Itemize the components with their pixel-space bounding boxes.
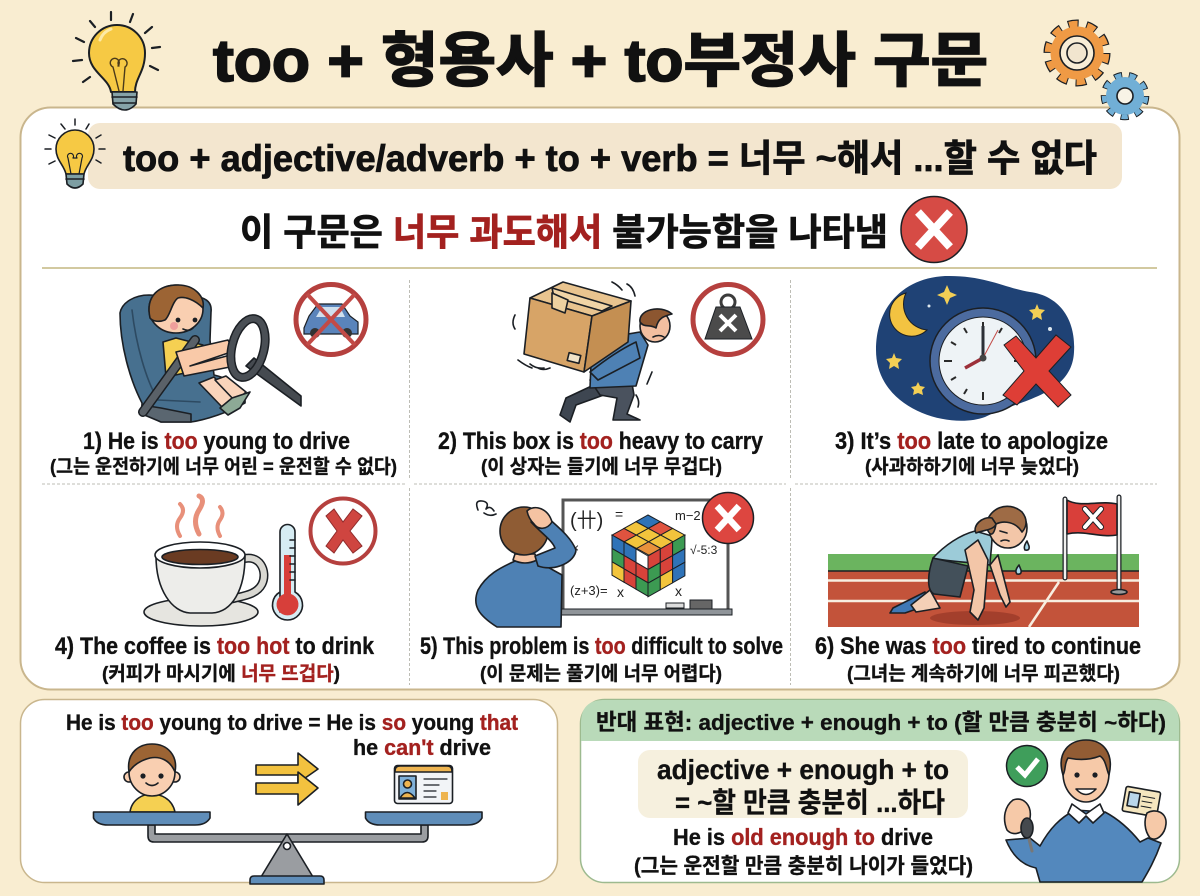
illustration: whiteboard with cube: [476, 500, 732, 627]
translation 5: (이 문제는 풀기에 너무 어렵다): [480, 663, 722, 685]
icon: red X badge: [702, 492, 754, 544]
panel 3: too late to apologize: [835, 276, 1108, 478]
equivalence sentence: he can't drive: [353, 735, 491, 760]
illustration: night clock: [876, 276, 1074, 421]
icon: red X in ring: [310, 498, 376, 564]
caption 2: 2) This box is too heavy to carry: [438, 428, 764, 455]
caption 1: 1) He is too young to drive: [83, 428, 350, 455]
formula box: [638, 750, 968, 818]
green header: [581, 700, 1179, 741]
illustration: whiteboard with cube: (卄): [570, 509, 603, 532]
panel: opposite expression: [580, 700, 1180, 882]
translation 4: (커피가 마시기에 너무 뜨겁다): [102, 663, 340, 685]
formula box: = ~할 만큼 충분히 ...하다: [675, 787, 945, 818]
translation: (그는 운전할 만큼 충분히 나이가 들었다): [634, 855, 973, 878]
panel 6: too tired to continue: [815, 497, 1141, 685]
illustration: whiteboard with cube: √-5:3: [690, 543, 718, 557]
illustration: man carrying box: [513, 282, 672, 422]
title: too + 형용사 + to부정사 구문: [213, 28, 988, 94]
panel: equivalence balance: [20, 700, 558, 884]
illustration: whiteboard with cube: x: [617, 584, 624, 600]
illustration: whiteboard with cube: ×: [572, 541, 579, 555]
illustration: child in car seat: [120, 285, 301, 422]
panel 5: too difficult to solve: [420, 492, 783, 685]
illustration: happy man with key and license: [1005, 740, 1166, 882]
icon: no heavy weight: [693, 284, 763, 354]
icon: red X circle: [901, 196, 967, 262]
caption 6: 6) She was too tired to continue: [815, 633, 1141, 660]
translation 2: (이 상자는 들기에 너무 무겁다): [481, 456, 722, 478]
caption 4: 4) The coffee is too hot to drink: [55, 633, 375, 660]
translation 3: (사과하하기에 너무 늦었다): [865, 456, 1079, 478]
illustration: child on scale: [124, 744, 180, 812]
panel 2: too heavy to carry: [438, 282, 764, 478]
illustration: whiteboard with cube: =: [615, 506, 623, 522]
equivalence sentence: [66, 710, 518, 760]
illustration: hot coffee and thermometer: [144, 496, 302, 626]
illustration: whiteboard with cube: m−2: [675, 508, 701, 523]
icon: small light bulb: [45, 119, 105, 188]
illustration: exhausted runner: [828, 497, 1139, 627]
subheading: 이 구문은 너무 과도해서 불가능함을 나타냄: [240, 212, 888, 253]
equivalence sentence: He is too young to drive = He is so young that: [66, 710, 518, 735]
panel 1: too young to drive: [50, 284, 397, 478]
caption 3: 3) It’s too late to apologize: [835, 428, 1108, 455]
formula bar: [88, 123, 1122, 189]
formula box: adjective + enough + to: [657, 754, 949, 785]
icon: gears: [1048, 24, 1146, 117]
icon: light bulb: [73, 12, 160, 110]
icon: green check: [1006, 746, 1048, 786]
green header: 반대 표현: adjective + enough + to (할 만큼 충분히 ~하다): [596, 710, 1166, 735]
illustration: balance scale: [94, 812, 482, 884]
caption 5: 5) This problem is too difficult to solve: [420, 633, 783, 660]
translation 1: (그는 운전하기에 너무 어린 = 운전할 수 없다): [50, 456, 397, 478]
icon: double arrows: [256, 753, 318, 805]
icon: ID card: [394, 766, 452, 804]
example sentence: He is old enough to drive: [673, 824, 933, 850]
main panel: [20, 108, 1180, 690]
illustration: whiteboard with cube: (z+3)=: [570, 583, 608, 598]
panel 4: too hot to drink: [55, 496, 376, 685]
illustration: whiteboard with cube: x: [675, 583, 682, 599]
formula bar: too + adjective/adverb + to + verb = 너무 ~해서 ...할 수 없다: [123, 138, 1097, 179]
translation 6: (그녀는 계속하기에 너무 피곤했다): [847, 663, 1120, 685]
icon: no car: [296, 284, 366, 354]
